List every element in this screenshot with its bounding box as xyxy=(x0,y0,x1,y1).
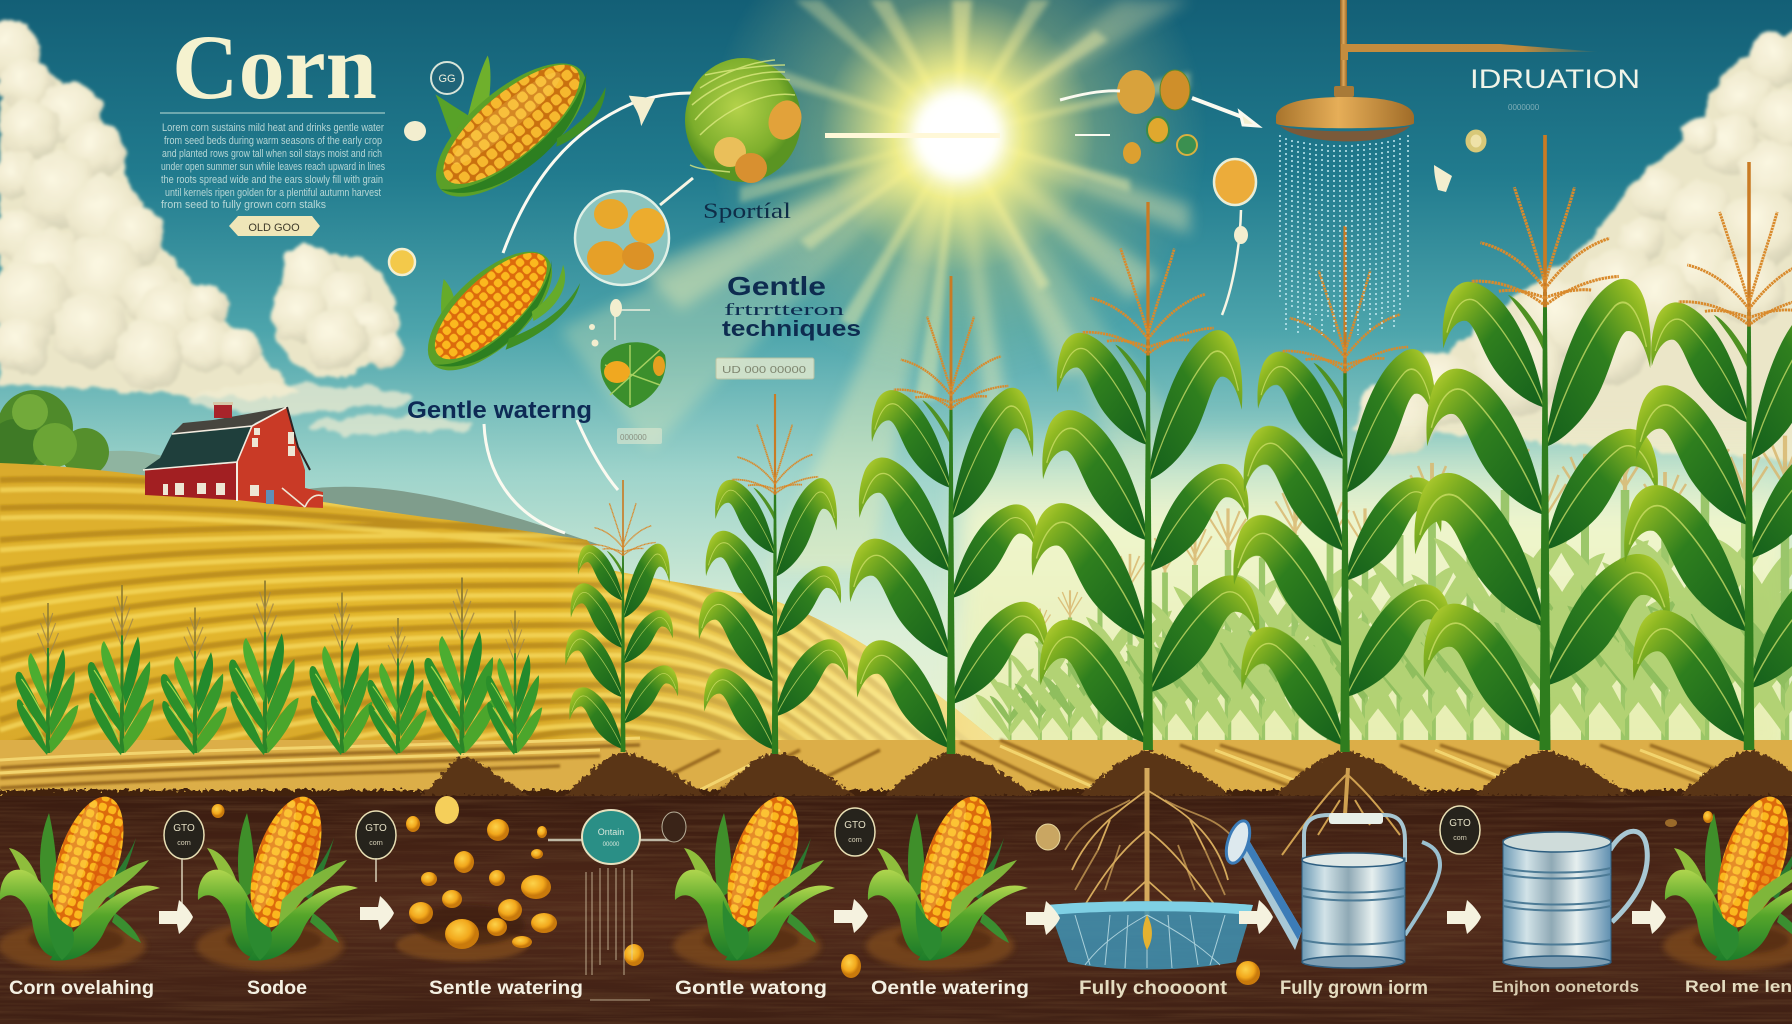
corn icon: stage 4 xyxy=(673,788,835,970)
small caption box xyxy=(716,358,814,379)
corn icon: stage 1 xyxy=(0,788,160,970)
clouds: left xyxy=(0,20,470,434)
stage labels: Enjhon oonetords xyxy=(1492,979,1639,996)
badge: stage 1 xyxy=(164,811,204,859)
corn icon: stage 5 xyxy=(866,788,1028,970)
title rule xyxy=(160,112,385,114)
title: Corn xyxy=(172,16,377,118)
metal can with handle xyxy=(1503,831,1647,968)
label: Sportil: Sportíal xyxy=(703,198,791,223)
heading: gentle irrigation techniques: Gentle xyxy=(727,271,826,301)
stage labels: Oentle watering xyxy=(871,978,1029,999)
background corn rows xyxy=(975,436,1792,745)
stage labels: Fully grown iorm xyxy=(1280,978,1428,999)
small disc xyxy=(1468,132,1484,150)
label: Gentle watering: Gentle waterng xyxy=(407,397,592,424)
pill button xyxy=(229,216,320,236)
faint sub-label: 0000000 xyxy=(1508,103,1540,112)
small icon badge xyxy=(431,62,463,94)
husk ball with kernels xyxy=(685,58,807,183)
heading: gentle irrigation techniques: techniques xyxy=(722,316,861,341)
water spray xyxy=(1280,135,1408,335)
arc arrows from label xyxy=(484,420,618,533)
root system: second plant xyxy=(1282,768,1400,855)
arrows between stages xyxy=(159,896,1666,935)
intro text block: under open summer sun while leaves reach upward in lines xyxy=(161,161,385,173)
golden furrow strip xyxy=(0,738,1792,800)
fine vertical lines near seeds xyxy=(586,868,650,1000)
seed dot xyxy=(389,249,415,275)
corn cob: upper xyxy=(392,8,618,225)
heading: gentle irrigation techniques xyxy=(722,271,861,341)
cream dot xyxy=(404,121,426,141)
connector: stage 1 xyxy=(181,858,183,905)
yellow oval with connector xyxy=(1214,159,1256,315)
cornfield haze backdrop xyxy=(960,420,1792,760)
wooden panel background xyxy=(0,796,1792,1024)
connector: stage 2 xyxy=(375,858,377,882)
small caption box: UD 000 00000 xyxy=(722,365,807,376)
teal badge with link lines: 00000 xyxy=(603,842,620,848)
badge: can stage xyxy=(1440,806,1480,854)
stage labels: Sentle watering xyxy=(429,978,583,999)
intro text block: Lorem corn sustains mild heat and drinks gentle water xyxy=(162,122,384,134)
pill button: OLD GOO xyxy=(248,222,300,234)
distant green hills and tree xyxy=(0,390,600,545)
teal badge with link lines: Ontain xyxy=(598,827,624,837)
stage labels: Corn ovelahing xyxy=(9,978,154,999)
heading: gentle irrigation techniques: frtrrtteron xyxy=(724,300,845,319)
golden wheat field with contoured furrows xyxy=(0,460,1000,762)
intro text block xyxy=(161,122,385,211)
small tag: 000000 xyxy=(620,433,647,442)
small tag xyxy=(617,428,662,444)
leaf cluster icon with connector xyxy=(589,299,666,408)
sun-side arrows xyxy=(1060,91,1258,135)
clouds: right xyxy=(1350,25,1792,460)
corn cob: lower xyxy=(395,213,587,402)
intro text block: from seed to fully grown corn stalks xyxy=(161,199,326,211)
stage labels: Reol me len xyxy=(1685,977,1792,996)
small icon badge: GG xyxy=(438,73,456,85)
stage labels xyxy=(9,977,1792,999)
sky background xyxy=(0,0,1792,790)
connector to kernel bubble xyxy=(660,178,693,205)
sun with rays xyxy=(560,0,1208,570)
intro text block: and planted rows grow tall when soil stays moist and rich xyxy=(162,148,382,160)
intro text block: the roots spread wide and the ears slowly fill with grain xyxy=(161,174,383,186)
stage labels: Fully choooont xyxy=(1079,978,1228,999)
shower head xyxy=(1276,0,1600,141)
kernels at top right of sun xyxy=(1117,70,1197,164)
label: IDRUATION: IDRUATION xyxy=(1470,64,1640,94)
kernel bubble xyxy=(575,191,669,285)
curved arrow between cobs xyxy=(503,93,693,253)
corn icon: stage 2 xyxy=(196,788,358,970)
badge: stage 2 xyxy=(356,811,396,859)
red barn xyxy=(143,402,323,508)
water basin xyxy=(1048,901,1253,970)
badge: stage 4 xyxy=(835,808,875,856)
scattered corn seeds xyxy=(212,796,1713,985)
small cream marker arrow xyxy=(1434,165,1452,192)
teal badge with link lines xyxy=(548,810,686,864)
corn icon: stage 9 xyxy=(1663,788,1792,970)
stage labels: Sodoe xyxy=(247,978,307,999)
growth stage corn plants xyxy=(565,135,1792,754)
soil mounds and strip xyxy=(0,750,1792,812)
intro text block: until kernels ripen golden for a plentiful autumn harvest xyxy=(165,187,381,199)
watering can with spout xyxy=(1222,813,1440,968)
young corn seedlings row xyxy=(16,578,542,755)
root system: large plant xyxy=(1065,768,1235,920)
intro text block: from seed beds during warm seasons of the early crop xyxy=(164,135,382,147)
stage labels: Gontle watong xyxy=(675,978,827,999)
